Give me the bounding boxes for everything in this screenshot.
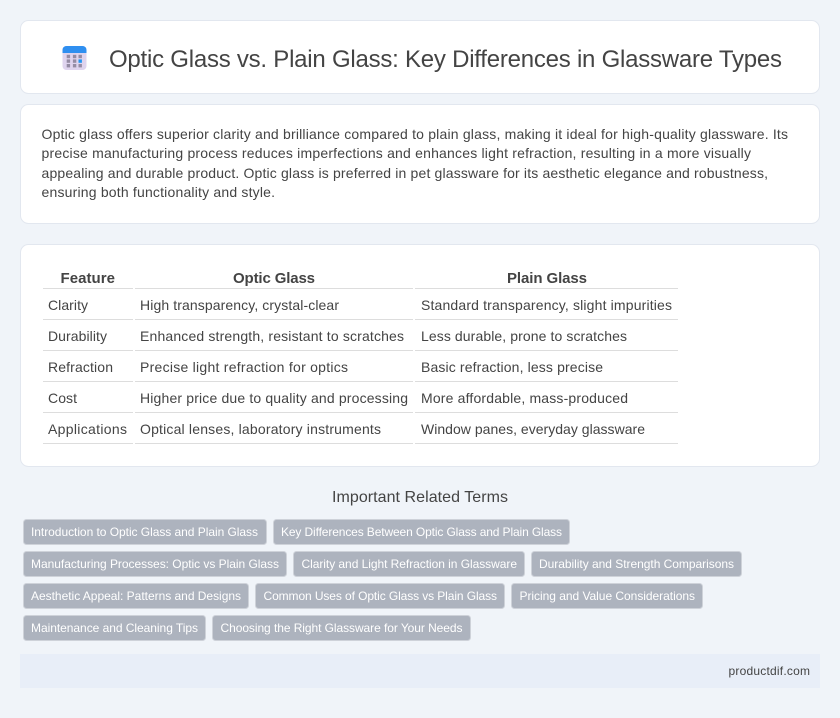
row: applications: Applications — [48, 421, 127, 437]
icon: calendar — [62, 46, 86, 70]
intro paragraph: precise manufacturing process reduces imperfections and enhances light refraction, resulting in a more visually — [42, 145, 751, 161]
row: cost: Cost — [48, 390, 77, 406]
row: clarity: Clarity — [48, 297, 88, 313]
row: cost: Higher price due to quality and processing — [140, 390, 408, 406]
panel: comparison table — [20, 244, 820, 466]
table header: Feature — [60, 270, 115, 287]
header panel — [20, 20, 820, 94]
tag: Introduction to Optic Glass and Plain Glass — [31, 525, 258, 539]
tag: Aesthetic Appeal: Patterns and Designs — [31, 589, 241, 603]
panel: introduction — [20, 104, 820, 224]
row: refraction: Precise light refraction for optics — [140, 359, 348, 375]
row: applications — [43, 421, 678, 444]
tag: Durability and Strength Comparisons — [539, 557, 734, 571]
tag — [24, 520, 266, 544]
table header: Optic Glass — [233, 270, 315, 287]
tag: Choosing the Right Glassware for Your Needs — [220, 621, 462, 635]
tag: Maintenance and Cleaning Tips — [31, 621, 198, 635]
row: applications: Optical lenses, laboratory instruments — [140, 421, 381, 437]
intro paragraph: ensuring both functionality and style. — [42, 184, 275, 200]
tag — [24, 552, 286, 576]
tag — [256, 584, 504, 608]
tag — [24, 616, 206, 640]
table header: Plain Glass — [507, 270, 587, 287]
row: durability: Enhanced strength, resistant to scratches — [140, 328, 404, 344]
tag — [212, 616, 470, 640]
tag — [294, 552, 524, 576]
tag: Pricing and Value Considerations — [520, 589, 695, 603]
heading: important related terms: Important Related Terms — [332, 489, 508, 506]
row: applications: Window panes, everyday glassware — [421, 421, 645, 437]
intro paragraph — [42, 126, 788, 200]
related term tags — [24, 520, 742, 640]
intro paragraph: Optic glass offers superior clarity and brilliance compared to plain glass, making it ideal for high-quality glassware. Its — [42, 126, 788, 142]
tag: Common Uses of Optic Glass vs Plain Glass — [264, 589, 497, 603]
tag — [24, 584, 248, 608]
row: refraction: Refraction — [48, 359, 113, 375]
footer — [20, 654, 820, 688]
row: clarity: Standard transparency, slight impurities — [421, 297, 672, 313]
row: durability: Durability — [48, 328, 107, 344]
row: clarity — [43, 297, 678, 320]
row: durability — [43, 328, 678, 351]
table header — [43, 270, 678, 289]
row: durability: Less durable, prone to scratches — [421, 328, 627, 344]
tag: Key Differences Between Optic Glass and Plain Glass — [281, 525, 562, 539]
tag — [532, 552, 742, 576]
tag — [274, 520, 570, 544]
intro paragraph: appealing and durable product. Optic glass is preferred in pet glassware for its aesthetic elegance and robustness, — [42, 165, 768, 181]
row: cost — [43, 390, 678, 413]
footer source text: productdif.com — [728, 664, 810, 678]
row: cost: More affordable, mass-produced — [421, 390, 628, 406]
row: refraction — [43, 359, 678, 382]
row: refraction: Basic refraction, less precise — [421, 359, 603, 375]
tag: Clarity and Light Refraction in Glassware — [302, 557, 517, 571]
tag — [512, 584, 702, 608]
tag: Manufacturing Processes: Optic vs Plain Glass — [31, 557, 279, 571]
title: Optic Glass vs. Plain Glass: Key Differences in Glassware Types — [109, 46, 782, 73]
row: clarity: High transparency, crystal-clear — [140, 297, 339, 313]
